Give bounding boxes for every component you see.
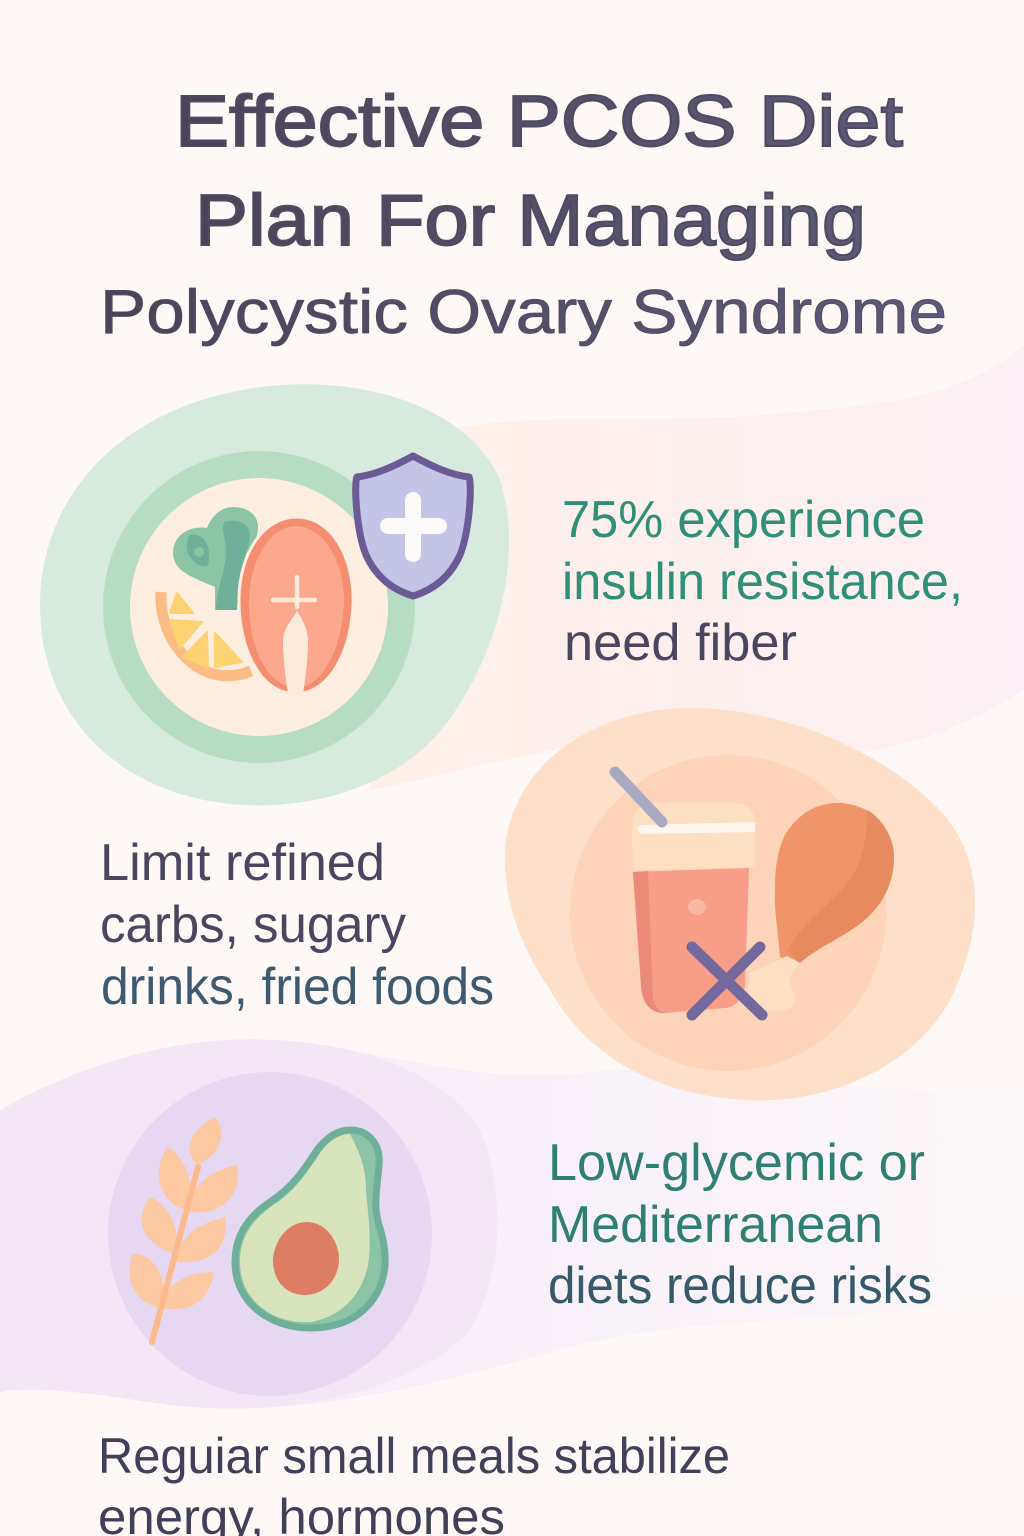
icon: avocado bbox=[235, 1130, 385, 1328]
icon: salmon steak bbox=[239, 517, 353, 695]
icon: drumstick bbox=[748, 803, 894, 1010]
text: insulin resistance bbox=[562, 491, 963, 672]
icon: broccoli bbox=[173, 507, 258, 610]
text: limit refined carbs bbox=[100, 834, 494, 1016]
text: limit refined carbs: drinks, fried foods bbox=[101, 958, 494, 1016]
icon: wheat and avocado bbox=[108, 1072, 432, 1396]
text: limit refined carbs: carbs, sugary bbox=[100, 896, 406, 954]
text: insulin resistance: 75% experience bbox=[562, 491, 925, 549]
title bbox=[100, 82, 947, 347]
text: low-glycemic diets: diets reduce risks bbox=[548, 1257, 932, 1315]
text: limit refined carbs: Limit refined bbox=[100, 834, 385, 892]
icon: glass bbox=[632, 803, 755, 1013]
text: insulin resistance: insulin resistance, bbox=[562, 553, 963, 611]
text: low-glycemic diets: Low-glycemic or bbox=[548, 1134, 925, 1192]
text: low-glycemic diets bbox=[548, 1134, 932, 1315]
title: Effective PCOS Diet bbox=[175, 82, 903, 162]
text: insulin resistance: need fiber bbox=[564, 614, 797, 672]
text: low-glycemic diets: Mediterranean bbox=[548, 1196, 883, 1254]
icon: citrus slice bbox=[161, 592, 251, 676]
title: Plan For Managing bbox=[195, 181, 866, 261]
text: regular small meals: Reguiar small meals stabilize bbox=[98, 1428, 730, 1484]
icon: wheat bbox=[129, 1117, 238, 1342]
icon: smoothie and chicken drumstick crossed bbox=[505, 708, 975, 1100]
icon: shield with plus bbox=[356, 456, 470, 596]
icon: cross bbox=[692, 947, 762, 1015]
text: regular small meals bbox=[98, 1428, 730, 1536]
title: Polycystic Ovary Syndrome bbox=[100, 278, 947, 347]
icon: plate with salmon, broccoli, citrus and shield bbox=[40, 384, 509, 805]
icon: straw bbox=[615, 772, 662, 822]
